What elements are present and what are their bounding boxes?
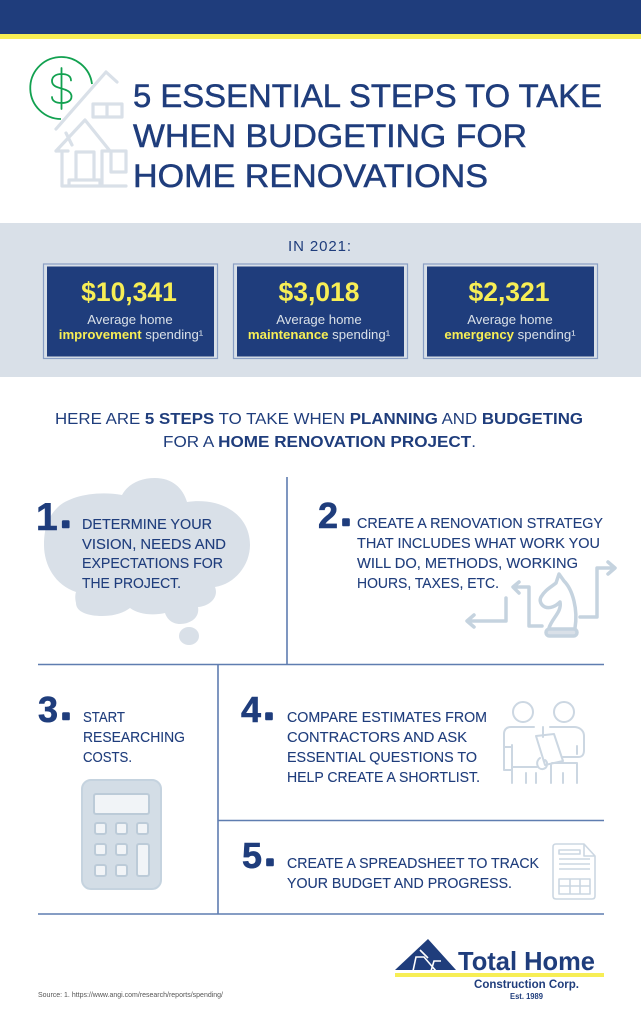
stat card: improvement bbox=[44, 264, 218, 358]
number 5: . bbox=[265, 832, 275, 873]
icon: house with dollar coin bbox=[30, 57, 126, 186]
number 1: . bbox=[61, 494, 71, 535]
number 3: 3 bbox=[38, 689, 58, 730]
panel: 2021 statistics bbox=[0, 223, 641, 377]
stat card: improvement: Average home bbox=[87, 312, 173, 327]
logo name: Total Home bbox=[458, 946, 595, 976]
step 5 text: CREATE A SPREADSHEET TO TRACK bbox=[287, 856, 539, 872]
step 4 text bbox=[287, 710, 487, 786]
step 3 text: RESEARCHING bbox=[83, 730, 185, 746]
step 2 bbox=[318, 492, 615, 636]
stat card: emergency: $2,321 bbox=[468, 277, 550, 307]
number 3: . bbox=[61, 686, 71, 727]
icon: two people with clipboard bbox=[504, 702, 584, 783]
icon: chess knight with arrows bbox=[467, 562, 615, 636]
logo: Total Home Construction Corp.: Est. 1989 bbox=[510, 992, 544, 1001]
step 2 text: THAT INCLUDES WHAT WORK YOU bbox=[357, 536, 600, 552]
step 2 text: HOURS, TAXES, ETC. bbox=[357, 576, 499, 592]
number 4: 4 bbox=[241, 689, 261, 730]
intro text bbox=[55, 411, 583, 451]
stat card: emergency: Average home bbox=[467, 312, 553, 327]
step 4 text: ESSENTIAL QUESTIONS TO bbox=[287, 750, 477, 766]
step 3 text bbox=[83, 710, 185, 766]
number 4: . bbox=[264, 686, 274, 727]
step 5 text bbox=[287, 856, 539, 892]
title: WHEN BUDGETING FOR bbox=[133, 118, 527, 154]
stat card: emergency: emergency spending¹ bbox=[444, 327, 576, 342]
stat card: maintenance bbox=[234, 264, 408, 358]
icon: spreadsheet document bbox=[553, 844, 595, 899]
step 2 text bbox=[357, 516, 603, 592]
logo: Total Home Construction Corp.: Construction Corp. bbox=[474, 977, 579, 991]
title: 5 ESSENTIAL STEPS TO TAKE bbox=[133, 78, 602, 114]
step 5 text: YOUR BUDGET AND PROGRESS. bbox=[287, 876, 512, 892]
number 2: . bbox=[341, 492, 351, 533]
step 2 text: WILL DO, METHODS, WORKING bbox=[357, 556, 578, 572]
step 3 text: START bbox=[83, 710, 125, 726]
stat card: improvement: improvement spending¹ bbox=[59, 327, 204, 342]
intro text: HERE ARE 5 STEPS TO TAKE WHEN PLANNING AND BUDGETING bbox=[55, 411, 583, 428]
step 3 text: COSTS. bbox=[83, 750, 132, 766]
stat card: maintenance: Average home bbox=[276, 312, 362, 327]
icon: calculator bbox=[82, 780, 161, 889]
icon: thought cloud bbox=[44, 478, 250, 645]
step 1 text: DETERMINE YOUR bbox=[82, 517, 212, 533]
icon: dollar coin bbox=[30, 57, 92, 119]
number 5: 5 bbox=[242, 835, 262, 876]
step 4 text: HELP CREATE A SHORTLIST. bbox=[287, 770, 480, 786]
step 4 bbox=[241, 686, 584, 786]
intro text: FOR A HOME RENOVATION PROJECT . bbox=[163, 434, 476, 451]
icon: house bbox=[56, 72, 126, 186]
step 4 text: COMPARE ESTIMATES FROM bbox=[287, 710, 487, 726]
step 5 bbox=[242, 832, 595, 899]
step 4 text: CONTRACTORS AND ASK bbox=[287, 730, 467, 746]
source footnote: Source: 1. https://www.angi.com/research/reports/spending/ bbox=[38, 990, 224, 999]
logo mark bbox=[395, 939, 456, 971]
title: HOME RENOVATIONS bbox=[133, 158, 488, 194]
stat card: emergency bbox=[424, 264, 598, 358]
step 1 text bbox=[82, 517, 226, 592]
stat card: improvement: $10,341 bbox=[81, 277, 177, 307]
stat card: maintenance: $3,018 bbox=[278, 277, 360, 307]
step 1 text: EXPECTATIONS FOR bbox=[82, 556, 223, 572]
number 2: 2 bbox=[318, 495, 338, 536]
top banner bbox=[0, 0, 641, 39]
step 1 text: THE PROJECT. bbox=[82, 576, 181, 592]
step 1 text: VISION, NEEDS AND bbox=[82, 537, 226, 553]
title bbox=[133, 78, 602, 194]
step 1 bbox=[36, 478, 250, 645]
stat card: maintenance: maintenance spending¹ bbox=[248, 327, 391, 342]
logo: Total Home Construction Corp. bbox=[395, 939, 604, 1001]
number 1: 1 bbox=[36, 496, 58, 539]
heading: in 2021: IN 2021: bbox=[288, 238, 351, 255]
step 3 bbox=[38, 686, 185, 889]
step 2 text: CREATE A RENOVATION STRATEGY bbox=[357, 516, 603, 532]
